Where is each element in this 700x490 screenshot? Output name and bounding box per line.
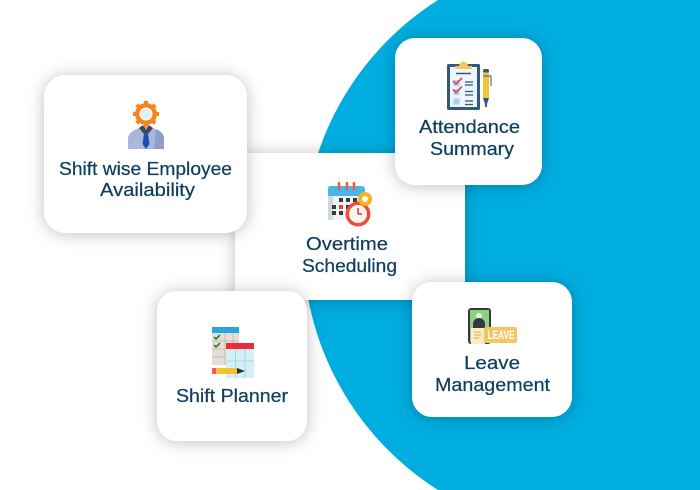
icon: employee with gear <box>128 101 164 149</box>
panel: shift planner <box>157 291 307 441</box>
label: Summary <box>430 138 515 159</box>
label: Scheduling <box>302 255 397 276</box>
panel: leave management <box>412 282 572 417</box>
label <box>59 158 232 200</box>
label: Shift Planner <box>176 385 288 406</box>
icon: planner sheets <box>212 327 254 378</box>
label <box>435 352 550 395</box>
icon: clipboard and pen <box>447 62 491 110</box>
label: Availability <box>100 179 196 200</box>
label: Management <box>435 374 550 395</box>
panel: attendance summary <box>395 38 542 185</box>
label <box>419 116 520 159</box>
label: Attendance <box>419 116 520 137</box>
icon: phone with leave tag: LEAVE <box>488 330 515 342</box>
background circle <box>303 0 700 490</box>
label: Overtime <box>306 233 388 254</box>
label: Shift wise Employee <box>59 158 232 179</box>
label <box>302 233 397 276</box>
panel: shift wise employee availability <box>44 75 247 233</box>
label: Leave <box>464 352 520 373</box>
panel: overtime scheduling <box>235 153 465 300</box>
icon: calendar with stopwatch <box>328 183 372 226</box>
icon: phone with leave tag <box>468 308 517 344</box>
